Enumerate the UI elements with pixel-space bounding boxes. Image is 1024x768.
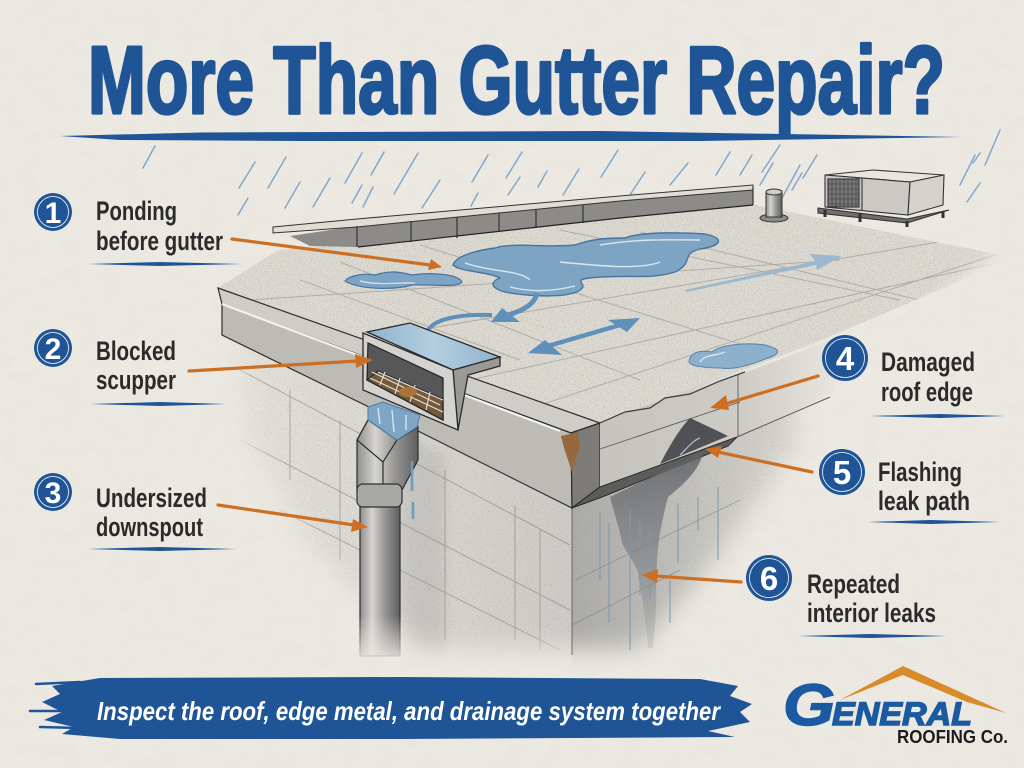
label 6: interior leaks <box>807 598 936 628</box>
badge 4 <box>822 335 868 381</box>
arrow 3 <box>218 505 368 532</box>
water falling into downspout <box>368 402 420 518</box>
downspout <box>357 420 418 660</box>
walls <box>233 344 806 662</box>
callout 4 <box>822 335 1005 418</box>
label 2: scupper <box>96 365 176 395</box>
label 2: Blocked <box>96 336 176 366</box>
logo tagline: ROOFING Co. <box>897 727 1008 747</box>
arrow 4 <box>710 376 818 410</box>
label 4: roof edge <box>881 377 973 407</box>
label 1: before gutter <box>96 226 223 256</box>
badge 4: 4 <box>836 340 855 377</box>
label 1: Ponding <box>96 196 177 226</box>
scupper front frame <box>363 333 458 430</box>
right fascia <box>572 340 835 508</box>
badge 2 <box>34 329 72 367</box>
logo roof <box>840 666 1006 713</box>
logo wordmark: ENERAL <box>832 696 972 732</box>
badge 2: 2 <box>45 333 61 366</box>
badge 6: 6 <box>760 560 778 597</box>
arrow 1 <box>232 239 442 270</box>
label 3: Undersized <box>96 483 207 513</box>
rain <box>143 130 1000 215</box>
logo <box>783 666 1008 747</box>
callout 1 <box>34 193 242 266</box>
callout 6 <box>746 555 947 638</box>
scupper box <box>363 323 500 430</box>
badge 3: 3 <box>45 477 61 510</box>
leak stain <box>600 452 718 650</box>
puddle: main ponding <box>453 233 718 296</box>
rust at corner <box>561 432 580 472</box>
label 5: Flashing <box>878 457 962 487</box>
callout 3 <box>34 473 236 551</box>
roof deck <box>219 205 997 422</box>
badge 1: 1 <box>45 197 61 230</box>
arrow 6 <box>642 569 741 583</box>
title underline <box>60 131 962 141</box>
roof vent pipe <box>760 189 788 222</box>
banner text: Inspect the roof, edge metal, and drainage system together <box>97 696 722 726</box>
badge 5 <box>819 449 865 495</box>
back parapet <box>273 185 753 247</box>
badge 5: 5 <box>833 454 851 491</box>
rooftop AC unit <box>818 170 949 227</box>
puddle: small left <box>345 272 462 288</box>
logo wordmark: G <box>783 673 835 738</box>
label 6: Repeated <box>807 569 900 599</box>
damaged flashing <box>660 418 728 464</box>
label 5: leak path <box>878 486 970 516</box>
bottom banner <box>30 677 752 739</box>
puddle: small right <box>689 344 778 368</box>
arrow 5 <box>705 446 812 472</box>
scupper top water panel <box>367 323 500 370</box>
callout 2 <box>34 329 226 406</box>
blue flow arrows <box>428 254 842 355</box>
call-out arrows <box>189 239 818 583</box>
arrow 2 <box>189 354 373 371</box>
left edge metal band <box>218 288 600 508</box>
debris grate <box>367 371 443 420</box>
badge 6 <box>746 555 792 601</box>
callout 5 <box>819 449 1000 524</box>
badge 1 <box>34 193 72 231</box>
label 4: Damaged <box>881 347 975 377</box>
badge 3 <box>34 473 72 511</box>
label 3: downspout <box>96 512 203 542</box>
